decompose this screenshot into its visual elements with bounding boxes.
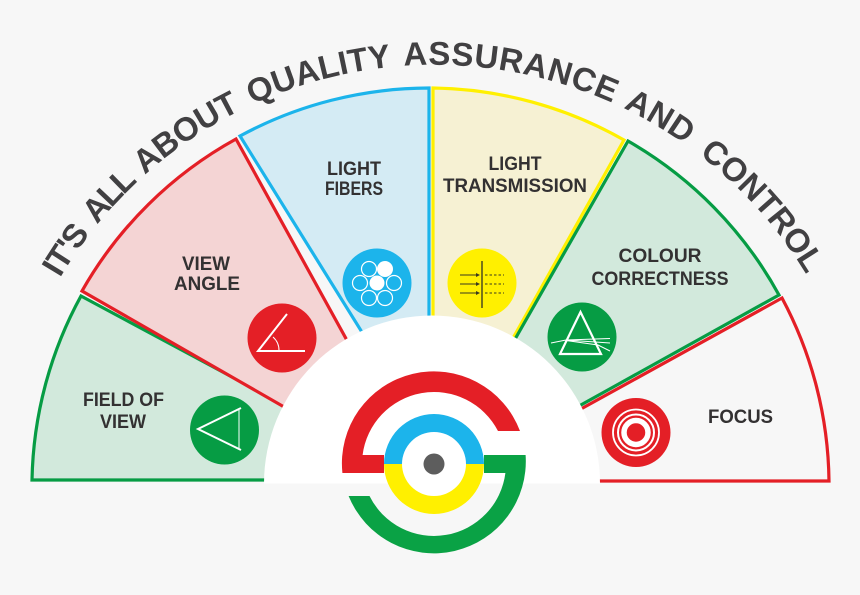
label: light fibers: FIBERS bbox=[325, 179, 383, 200]
logo bbox=[342, 371, 526, 553]
icon: fibers bbox=[342, 248, 412, 318]
label: light transmission bbox=[443, 154, 587, 197]
label: field of view: VIEW bbox=[100, 412, 146, 433]
label: colour correctness: COLOUR bbox=[618, 246, 702, 267]
icon: prism bbox=[548, 302, 616, 372]
logo: yellow half ring bbox=[384, 464, 484, 514]
title: IT'S ALL ABOUT QUALITY ASSURANCE AND CONTROL bbox=[42, 42, 818, 276]
icon: angle bbox=[248, 304, 316, 372]
panel: view angle bbox=[82, 139, 390, 462]
logo: green arc bbox=[349, 455, 526, 553]
label: view angle: ANGLE bbox=[174, 274, 240, 295]
icon: light transmission bbox=[448, 248, 516, 318]
logo: white disc bbox=[401, 431, 467, 497]
logo: centre dot bbox=[424, 454, 444, 474]
label: light transmission: LIGHT bbox=[488, 154, 542, 175]
label: colour correctness: CORRECTNESS bbox=[592, 269, 728, 290]
label: light fibers bbox=[325, 159, 383, 200]
icon: target bbox=[602, 398, 670, 467]
panel: light fibers bbox=[240, 88, 429, 440]
panel: focus bbox=[570, 298, 829, 481]
panel: centre semicircle bbox=[264, 316, 600, 484]
label: view angle: VIEW bbox=[182, 254, 230, 275]
logo: blue half ring bbox=[384, 414, 484, 464]
label: view angle bbox=[174, 254, 240, 295]
icon: field of view triangle bbox=[190, 396, 259, 464]
logo: red arc bbox=[342, 371, 520, 473]
label: colour correctness bbox=[592, 246, 728, 290]
label: focus: FOCUS bbox=[708, 407, 773, 428]
label: light fibers: LIGHT bbox=[327, 159, 381, 180]
panel: colour correctness bbox=[480, 141, 779, 461]
panel: field of view bbox=[32, 296, 400, 480]
label: field of view: FIELD OF bbox=[83, 390, 164, 411]
label: light transmission: TRANSMISSION bbox=[443, 176, 587, 197]
panel: light transmission bbox=[433, 88, 624, 481]
label: field of view bbox=[83, 390, 164, 433]
